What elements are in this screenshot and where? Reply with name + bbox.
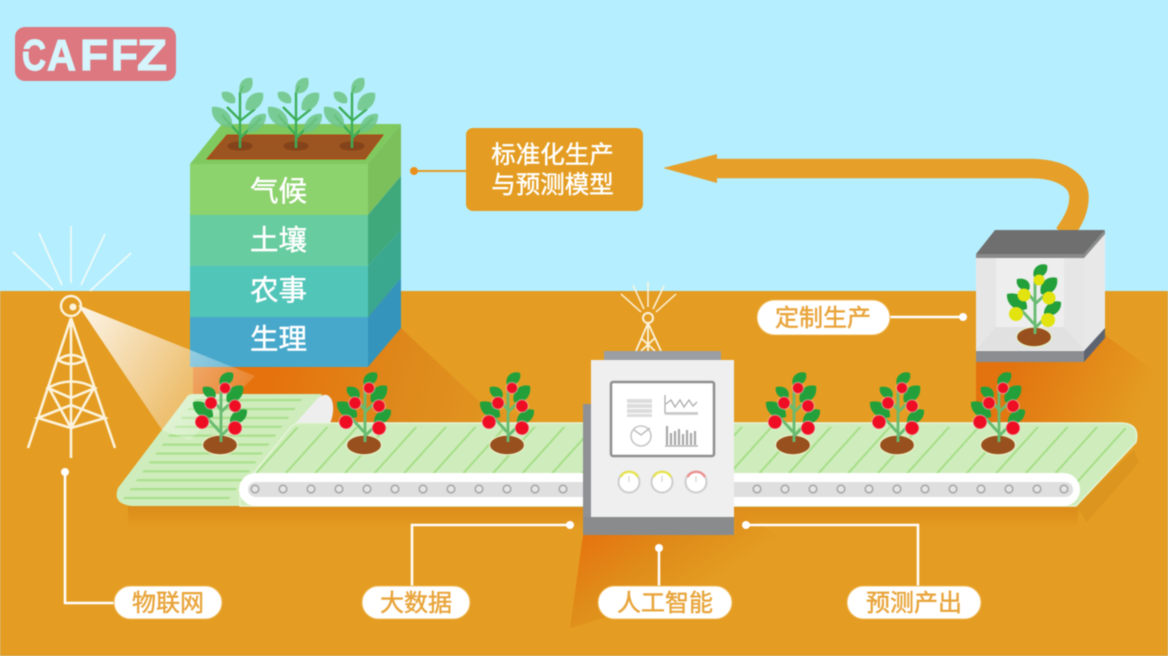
- small antenna on the machine: [621, 282, 676, 351]
- logo: CAFFZ: C: [22, 31, 46, 80]
- callout: predicted output: [742, 521, 981, 619]
- sprouts: [212, 78, 378, 151]
- layer: farming: [190, 266, 368, 317]
- IoT tower: [13, 226, 131, 458]
- callout: big data: [362, 521, 574, 619]
- plant 6: [971, 372, 1025, 455]
- custom production display box: [976, 230, 1105, 362]
- layer: soil: [190, 215, 368, 266]
- layer: climate: 气候: [250, 176, 307, 208]
- plant 2: [337, 372, 391, 455]
- callout: predicted output: 预测产出: [866, 590, 962, 617]
- logo: CAFFZ: [15, 27, 176, 81]
- plant 1: [193, 372, 247, 455]
- logo: CAFFZ: A: [47, 31, 76, 80]
- data stack block: [190, 78, 401, 367]
- logo: CAFFZ: F: [111, 31, 138, 80]
- callout: custom production: 定制生产: [775, 305, 871, 332]
- right side of the block: [368, 124, 401, 367]
- flow arrow: back to the model: [663, 154, 1079, 234]
- model label with connector: 与预测模型: [491, 171, 614, 199]
- callout: IoT: [61, 468, 222, 619]
- layer: farming: 农事: [250, 275, 307, 307]
- plant 4: [766, 372, 820, 455]
- callout: big data: 大数据: [380, 590, 452, 617]
- soil bed: [207, 135, 383, 159]
- top face of the block: [190, 124, 401, 164]
- callout: IoT: 物联网: [132, 590, 204, 617]
- layer: climate: [190, 164, 368, 215]
- plant 3: [480, 372, 534, 455]
- callout: AI: 人工智能: [617, 590, 713, 617]
- conveyor belt: [110, 394, 1137, 506]
- background: sky: [0, 0, 1168, 292]
- model label with connector: [410, 128, 643, 211]
- machine gauges: [618, 472, 706, 492]
- plant 5: [870, 372, 924, 455]
- AI machine: [583, 351, 734, 535]
- belt: white roller band: [239, 473, 1080, 506]
- shadows on ground: [128, 328, 1168, 628]
- layer: physiology: 生理: [250, 324, 307, 356]
- belt: rolled-out sheet: [110, 394, 330, 506]
- logo: CAFFZ: Z: [137, 31, 167, 80]
- callout: custom production: [757, 300, 967, 335]
- logo: CAFFZ: F: [80, 31, 108, 80]
- yellow-fruit plant: [1007, 264, 1061, 347]
- model label with connector: 标准化生产: [491, 141, 614, 169]
- plants on the belt: [193, 372, 1025, 455]
- light beam from the tower: [78, 305, 255, 440]
- layer: physiology: [190, 317, 368, 367]
- machine screen: [611, 382, 714, 456]
- layer: soil: 土壤: [250, 225, 307, 257]
- callout: AI: [598, 544, 732, 619]
- background: ground: [0, 291, 1168, 656]
- belt: curl of the sheet: [293, 395, 333, 426]
- belt: main surface: [240, 423, 1137, 506]
